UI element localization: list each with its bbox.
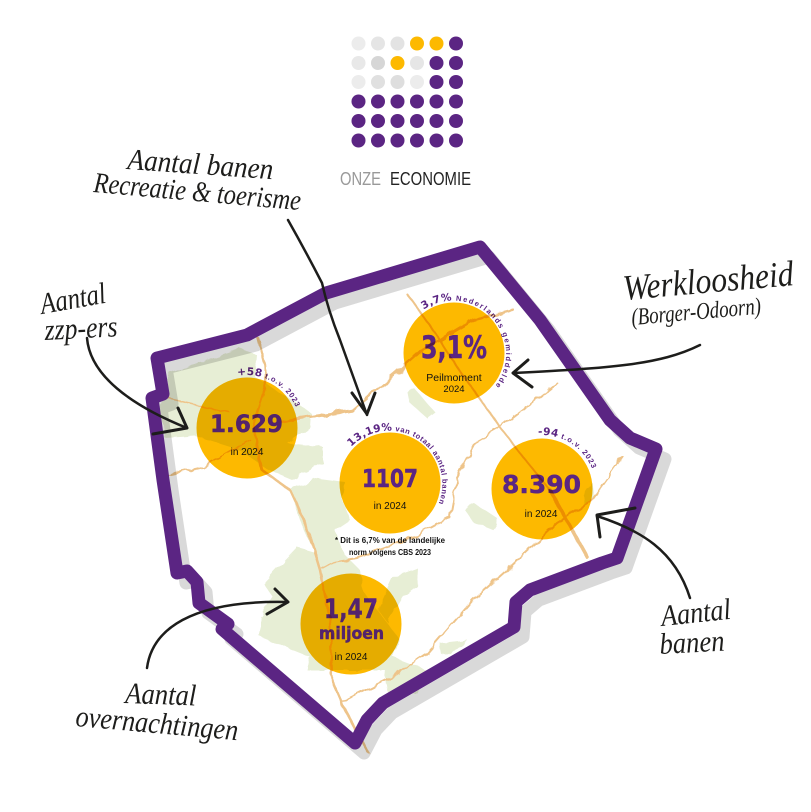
logo wordmark: ECONOMIE	[390, 169, 471, 189]
label: aantal banen recreatie en toerisme	[92, 143, 302, 217]
footnote: norm volgens CBS 2023	[349, 547, 431, 557]
label: werkloosheid	[621, 253, 796, 331]
stat: overnachtingen: miljoen	[319, 624, 384, 644]
map border outline	[152, 247, 656, 743]
arrow: zzp-ers	[87, 338, 187, 434]
stat: banen recreatie en toerisme: 13,19% van totaal aantal banen	[347, 422, 448, 504]
stat: banen recreatie en toerisme: 1107	[362, 464, 418, 493]
label: aantal banen: banen	[659, 625, 725, 661]
label: aantal banen	[658, 593, 732, 661]
stat: overnachtingen	[300, 574, 402, 674]
label: aantal banen: Aantal	[658, 593, 732, 633]
footnote: * Dit is 6,7% van de landelijke	[335, 535, 445, 545]
label: aantal zzp-ers: zzp-ers	[43, 310, 118, 347]
stat: zzp-ers: in 2024	[231, 447, 264, 458]
map border shadow	[161, 257, 665, 753]
stat: overnachtingen: 1,47	[324, 594, 378, 625]
label: aantal overnachtingen: overnachtingen	[74, 700, 240, 747]
stat: aantal banen: in 2024	[525, 509, 558, 520]
stat: overnachtingen: in 2024	[335, 652, 368, 663]
stat: banen recreatie en toerisme: in 2024	[374, 501, 407, 512]
stat: zzp-ers: +58 t.o.v. 2023	[238, 367, 300, 406]
stat: werkloosheid: 3,7% Nederlands gemiddelde	[420, 292, 512, 388]
label: aantal zzp-ers: Aantal	[36, 277, 108, 321]
label: aantal overnachtingen: Aantal	[123, 677, 197, 712]
arrow: recreatie	[288, 220, 375, 415]
stat: werkloosheid: 2024	[443, 384, 465, 395]
stat: zzp-ers	[196, 367, 300, 478]
stat: zzp-ers: 1.629	[210, 410, 283, 438]
label: aantal banen recreatie en toerisme: Recreatie & toerisme	[92, 167, 302, 217]
arrow: werkloosheid	[513, 345, 700, 387]
footnote	[335, 535, 445, 557]
stat: aantal banen	[492, 427, 596, 540]
logo: dot grid	[352, 36, 463, 148]
label: aantal overnachtingen	[74, 677, 240, 747]
arrow: aantal banen	[597, 508, 690, 598]
logo wordmark: ONZE	[340, 169, 381, 189]
arrow: overnachtingen	[147, 589, 288, 668]
stat: werkloosheid: Peilmoment	[426, 372, 482, 384]
logo wordmark	[340, 169, 471, 189]
label: aantal banen recreatie en toerisme: Aantal banen	[125, 143, 274, 186]
stat: werkloosheid: 3,1%	[421, 330, 487, 366]
map terrain: nature areas and roads	[160, 295, 623, 752]
stat: aantal banen: 8.390	[502, 470, 581, 499]
label: aantal zzp-ers	[36, 277, 118, 347]
stat: aantal banen: -94 t.o.v. 2023	[538, 427, 596, 468]
label: werkloosheid: (Borger-Odoorn)	[630, 294, 762, 331]
